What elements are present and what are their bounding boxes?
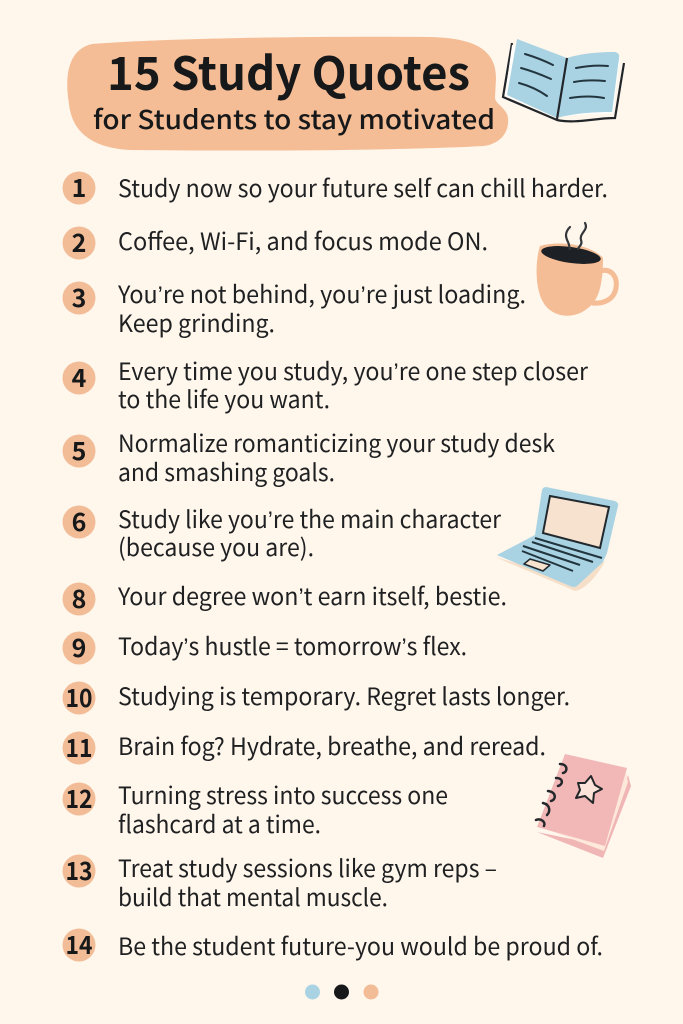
- icon: coffee cup: [537, 223, 616, 316]
- quote 11: Brain fog? Hydrate, breathe, and reread.: [118, 727, 546, 762]
- pagination dots: [305, 984, 378, 1000]
- quote 3: You’re not behind, you’re just loading.: [117, 275, 526, 310]
- quote 8: 8: [72, 580, 86, 616]
- title banner: [67, 37, 508, 151]
- quote 8: Your degree won’t earn itself, bestie.: [117, 577, 507, 612]
- quote 9: Today’s hustle = tomorrow’s flex.: [118, 627, 467, 662]
- quote 4: Every time you study, you’re one step closer: [118, 352, 589, 387]
- quote 10: 10: [66, 679, 92, 715]
- quote 12: [62, 776, 448, 840]
- icon: notebook: [536, 754, 631, 858]
- quote 6: Study like you’re the main character: [118, 500, 502, 535]
- quote 4: [62, 352, 589, 415]
- quote 5: 5: [72, 432, 86, 468]
- quote 1: Study now so your future self can chill harder.: [118, 169, 608, 204]
- quote 5: and smashing goals.: [118, 453, 335, 488]
- quote 1: 1: [72, 169, 86, 205]
- icon: laptop: [495, 487, 618, 591]
- banner blob: [67, 37, 508, 151]
- quote 13: 13: [66, 852, 92, 888]
- quote 3: [62, 275, 526, 339]
- title text: 15 Study Quotes: [107, 38, 470, 104]
- quote 2: 2: [72, 224, 86, 260]
- quote 14: 14: [66, 926, 93, 962]
- quote 14: Be the student future-you would be proud of.: [118, 927, 603, 962]
- quote 13: [62, 849, 497, 913]
- quote 4: to the life you want.: [118, 380, 330, 415]
- quote 6: 6: [72, 503, 86, 539]
- quote 4: 4: [72, 359, 87, 395]
- quote 9: 9: [72, 629, 86, 665]
- quote 10: Studying is temporary. Regret lasts longer.: [118, 677, 570, 712]
- icon: open book: [503, 39, 624, 121]
- quote 13: Treat study sessions like gym reps –: [118, 849, 497, 884]
- quote 5: Normalize romanticizing your study desk: [118, 424, 555, 459]
- quote 2: Coffee, Wi-Fi, and focus mode ON.: [118, 222, 488, 257]
- quote 13: build that mental muscle.: [118, 878, 388, 913]
- quote 6: [62, 500, 502, 563]
- quote 11: 11: [66, 729, 92, 765]
- quote 12: flashcard at a time.: [118, 805, 321, 840]
- quote 12: Turning stress into success one: [118, 776, 448, 811]
- quote 3: 3: [72, 279, 86, 315]
- quote 12: 12: [66, 780, 92, 816]
- quote 3: Keep grinding.: [118, 304, 275, 339]
- quote 5: [62, 424, 555, 488]
- quote 6: (because you are).: [118, 528, 314, 563]
- subtitle text: for Students to stay motivated: [93, 100, 495, 137]
